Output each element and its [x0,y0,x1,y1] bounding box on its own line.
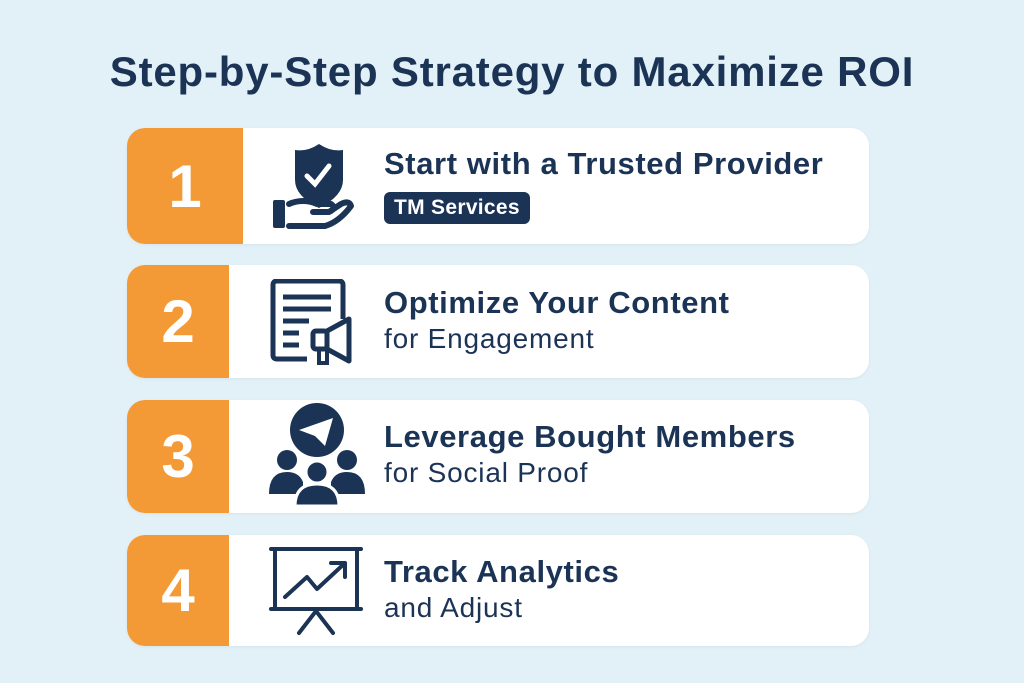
number 4 [127,535,229,646]
number 4: 4 [161,557,195,624]
heading: Optimize Your Content [384,285,730,320]
panel: step 4 [127,535,869,646]
panel: step 3 [127,400,869,513]
title: Step-by-Step Strategy to Maximize ROI [110,48,914,95]
number 1 [127,128,243,244]
heading: Track Analytics [384,554,619,589]
icon: shield hand [273,144,354,229]
number 2: 2 [161,288,195,355]
number 3 [127,400,229,513]
panel: step 2 [127,265,869,378]
subtext: and Adjust [384,592,523,623]
number 1: 1 [168,152,202,220]
tag [384,192,530,224]
tag: TM Services [394,196,520,219]
icon: chart presentation [269,547,363,636]
panel: step 1 [127,128,869,244]
number 3: 3 [161,423,195,490]
icon: people telegram [269,403,365,504]
heading: Start with a Trusted Provider [384,146,823,181]
icon: document megaphone [270,279,352,365]
number 2 [127,265,229,378]
subtext: for Engagement [384,323,594,354]
heading: Leverage Bought Members [384,419,796,454]
subtext: for Social Proof [384,457,588,488]
